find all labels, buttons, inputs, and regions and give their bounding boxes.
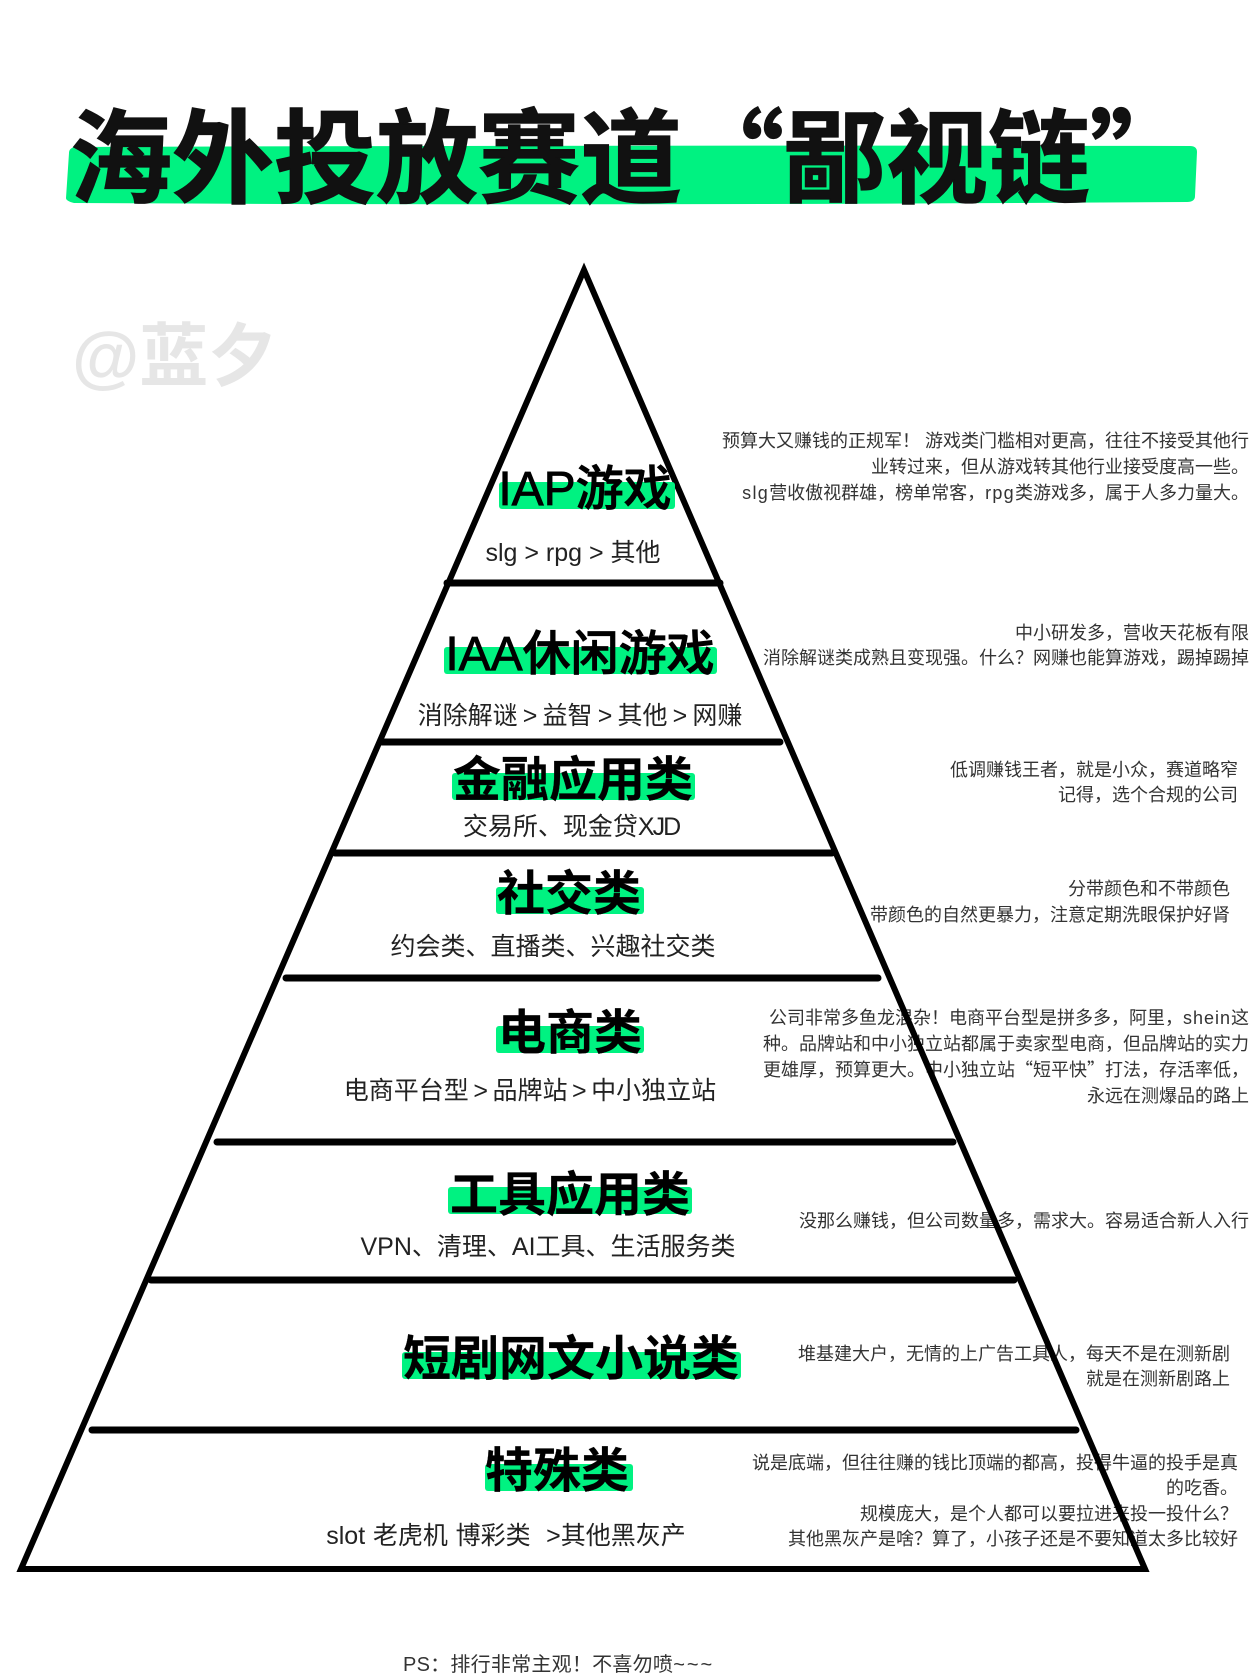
description: short drama — [798, 1344, 1230, 1389]
description: IAP: slg营收傲视群雄，榜单常客，rpg类游戏多，属于人多力量大。 — [742, 483, 1249, 503]
description: tools: 没那么赚钱，但公司数量多，需求大。容易适合新人入行 — [799, 1211, 1249, 1231]
watermark: @蓝夕 — [72, 318, 277, 395]
description: social: 分带颜色和不带颜色 — [1068, 879, 1230, 899]
description: e-commerce: 更雄厚，预算更大。中小独立站“短平快”打法，存活率低， — [763, 1056, 1249, 1082]
description: e-commerce: 永远在测爆品的路上 — [1087, 1086, 1249, 1106]
description: e-commerce: 公司非常多鱼龙混杂！电商平台型是拼多多，阿里，shein这 — [769, 1008, 1249, 1028]
description: special — [752, 1453, 1238, 1549]
description: IAA: 中小研发多，营收天花板有限 — [1015, 623, 1249, 643]
description: special: 规模庞大，是个人都可以要拉进来投一投什么？ — [860, 1504, 1238, 1524]
description: IAA — [763, 623, 1249, 668]
description: finance — [950, 760, 1238, 805]
tier: social: 社交类 — [497, 868, 641, 921]
description: special: 其他黑灰产是啥？算了，小孩子还是不要知道太多比较好 — [788, 1529, 1238, 1549]
tier: IAA casual games: IAA休闲游戏 — [445, 628, 715, 681]
tier: special — [326, 1445, 686, 1550]
tier: finance apps — [452, 754, 695, 841]
description: IAP — [722, 431, 1249, 503]
description: social: 带颜色的自然更暴力，注意定期洗眼保护好肾 — [870, 905, 1230, 925]
description: finance: 记得，选个合规的公司 — [1058, 785, 1238, 805]
tier: IAP games — [485, 463, 675, 567]
description: social — [870, 879, 1230, 925]
description: IAA: 消除解谜类成熟且变现强。什么？网赚也能算游戏，踢掉踢掉 — [763, 648, 1249, 668]
footnote: PS：排行非常主观！不喜勿喷~~~ — [403, 1653, 714, 1676]
description: short drama: 堆基建大户，无情的上广告工具人，每天不是在测新剧 — [798, 1344, 1230, 1364]
description: IAP: 业转过来，但从游戏转其他行业接受度高一些。 — [871, 457, 1249, 477]
tier: e-commerce: 电商平台型 > 品牌站 > 中小独立站 — [344, 1077, 716, 1105]
tier: tool apps — [360, 1169, 736, 1261]
tier: e-commerce — [344, 1007, 716, 1105]
description: e-commerce: 种。品牌站和中小独立站都属于卖家型电商，但品牌站的实力 — [763, 1034, 1249, 1054]
tier: finance apps: 金融应用类 — [453, 754, 693, 807]
pyramid outline — [21, 270, 1145, 1569]
description: special: 说是底端，但往往赚的钱比顶端的都高，投得牛逼的投手是真 — [752, 1453, 1238, 1473]
tier: tool apps: 工具应用类 — [450, 1169, 690, 1222]
tier: special: slot 老虎机 博彩类 >其他黑灰产 — [326, 1522, 686, 1550]
tier: IAP games: IAP游戏 — [498, 463, 672, 516]
description: e-commerce — [763, 1008, 1249, 1106]
tier: IAP games: slg > rpg > 其他 — [485, 539, 661, 567]
tier: special: 特殊类 — [485, 1445, 629, 1498]
tier: finance apps: 交易所、现金贷XJD — [463, 813, 680, 841]
title: 海外投放赛道“鄙视链” — [70, 78, 1192, 225]
tier: IAA casual games: 消除解谜 > 益智 > 其他 > 网赚 — [418, 702, 742, 730]
description: special: 的吃香。 — [1166, 1478, 1238, 1498]
description: short drama: 就是在测新剧路上 — [1086, 1369, 1230, 1389]
tier: tool apps: VPN、清理、AI工具、生活服务类 — [360, 1233, 736, 1261]
tier dividers — [92, 583, 1076, 1430]
description: finance: 低调赚钱王者，就是小众，赛道略窄 — [950, 760, 1238, 780]
tier: social — [390, 868, 716, 961]
tier: short drama and web novels: 短剧网文小说类 — [403, 1333, 739, 1386]
tier: e-commerce: 电商类 — [498, 1007, 642, 1060]
tier: IAA casual games — [418, 628, 742, 730]
tier: social: 约会类、直播类、兴趣社交类 — [390, 933, 716, 961]
description: IAP: 预算大又赚钱的正规军！ 游戏类门槛相对更高，往往不接受其他行 — [722, 431, 1249, 451]
